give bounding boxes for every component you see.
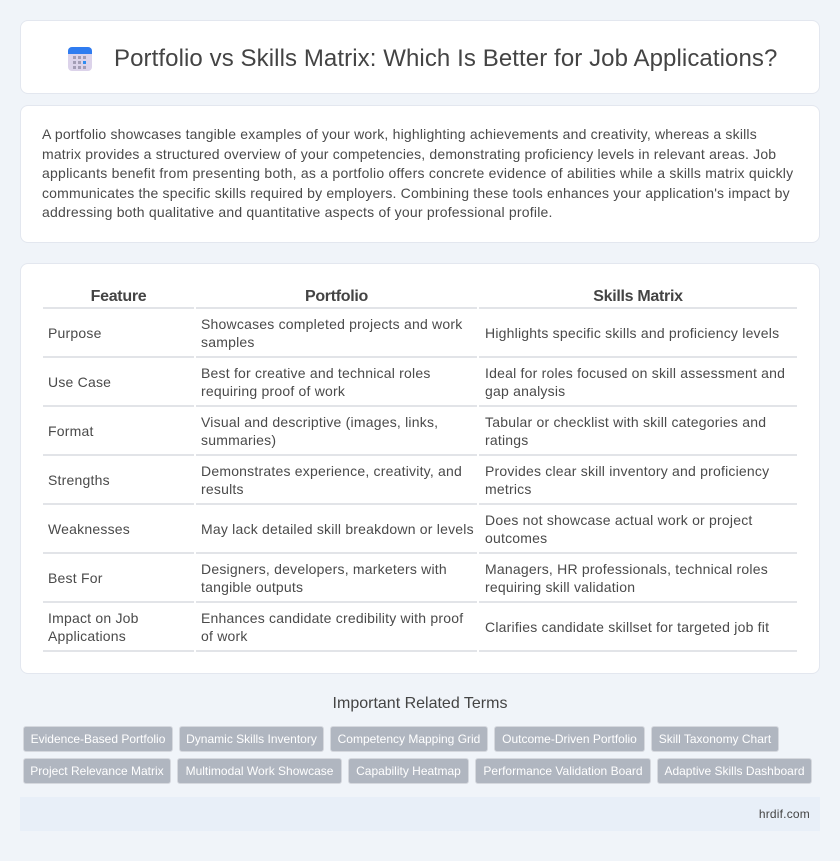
tag: Skill Taxonomy Chart <box>659 732 771 746</box>
intro text: matrix provides a structured overview of your competencies, demonstrating proficiency levels in relevant areas. Job <box>42 146 776 162</box>
row: format: ratings <box>485 432 528 448</box>
row: weaknesses: Weaknesses <box>48 521 130 537</box>
row: impact on job applications: Impact on Job <box>48 610 139 626</box>
tag <box>179 726 324 752</box>
row: use case: Best for creative and technical roles <box>201 365 431 381</box>
title: Portfolio vs Skills Matrix: Which Is Better for Job Applications? <box>114 45 777 72</box>
row: impact on job applications: Applications <box>48 628 126 644</box>
row: weaknesses: outcomes <box>485 530 547 546</box>
row: strengths: Demonstrates experience, creativity, and <box>201 463 462 479</box>
row: use case: Use Case <box>48 374 111 390</box>
row: best for: Designers, developers, marketers with <box>201 561 447 577</box>
row: format: Format <box>48 423 94 439</box>
row: use case: requiring proof of work <box>201 383 345 399</box>
row: strengths: metrics <box>485 481 532 497</box>
row: format <box>43 414 797 456</box>
intro text: A portfolio showcases tangible examples of your work, highlighting achievements and creativity, whereas a skills <box>42 126 757 142</box>
row: use case <box>43 365 797 407</box>
table header row <box>43 288 797 309</box>
tag <box>657 758 812 784</box>
row: impact on job applications: of work <box>201 628 248 644</box>
tag: Outcome-Driven Portfolio <box>502 732 637 746</box>
row: purpose: samples <box>201 334 255 350</box>
panel: introduction <box>20 105 820 243</box>
row: best for <box>43 561 797 603</box>
tag: Project Relevance Matrix <box>30 764 164 778</box>
tag <box>330 726 488 752</box>
row: format: summaries) <box>201 432 276 448</box>
row: best for: Best For <box>48 570 103 586</box>
intro text: communicates the specific skills required by employers. Combining these tools enhances your application's impact by <box>42 185 790 201</box>
panel: header <box>20 20 820 94</box>
row: strengths <box>43 463 797 505</box>
tag <box>23 726 173 752</box>
tag: Dynamic Skills Inventory <box>186 732 317 746</box>
tag <box>475 758 651 784</box>
tag: Multimodal Work Showcase <box>186 764 333 778</box>
row: best for: requiring skill validation <box>485 579 635 595</box>
tag: Competency Mapping Grid <box>338 732 480 746</box>
tag <box>23 758 171 784</box>
footer source text: hrdif.com <box>759 807 810 821</box>
footer <box>20 797 820 831</box>
row: format: Tabular or checklist with skill categories and <box>485 414 766 430</box>
tag: Evidence-Based Portfolio <box>31 732 165 746</box>
row: strengths: Strengths <box>48 472 110 488</box>
row: purpose <box>43 316 797 358</box>
row: best for: Managers, HR professionals, technical roles <box>485 561 768 577</box>
intro text: applicants benefit from presenting both, as a portfolio offers concrete evidence of abilities while a skills matrix quickly <box>42 165 793 181</box>
tag: Performance Validation Board <box>483 764 643 778</box>
row: use case: gap analysis <box>485 383 565 399</box>
tag: Adaptive Skills Dashboard <box>664 764 805 778</box>
tag <box>177 758 342 784</box>
header: skills matrix: Skills Matrix <box>593 288 683 305</box>
row: best for: tangible outputs <box>201 579 303 595</box>
row: weaknesses <box>43 512 797 554</box>
header: portfolio: Portfolio <box>305 288 368 305</box>
intro text <box>42 126 794 220</box>
row: impact on job applications: Enhances candidate credibility with proof <box>201 610 463 626</box>
row: purpose: Highlights specific skills and proficiency levels <box>485 325 779 341</box>
row: format: Visual and descriptive (images, links, <box>201 414 438 430</box>
icon: calendar grid <box>68 47 92 71</box>
tag <box>494 726 645 752</box>
panel: comparison table <box>20 263 820 674</box>
header: feature: Feature <box>91 288 146 305</box>
row: weaknesses: Does not showcase actual work or project <box>485 512 753 528</box>
tag: Capability Heatmap <box>356 764 461 778</box>
row: purpose: Purpose <box>48 325 102 341</box>
row: purpose: Showcases completed projects and work <box>201 316 462 332</box>
row: use case: Ideal for roles focused on skill assessment and <box>485 365 785 381</box>
row: strengths: Provides clear skill inventory and proficiency <box>485 463 769 479</box>
row: strengths: results <box>201 481 244 497</box>
tag <box>651 726 779 752</box>
row: impact on job applications <box>43 610 797 652</box>
intro text: addressing both qualitative and quantitative aspects of your professional profile. <box>42 204 553 220</box>
row: weaknesses: May lack detailed skill breakdown or levels <box>201 521 474 537</box>
tag <box>348 758 469 784</box>
heading: related terms: Important Related Terms <box>333 695 507 712</box>
related term tags <box>23 726 812 784</box>
row: impact on job applications: Clarifies candidate skillset for targeted job fit <box>485 619 769 635</box>
